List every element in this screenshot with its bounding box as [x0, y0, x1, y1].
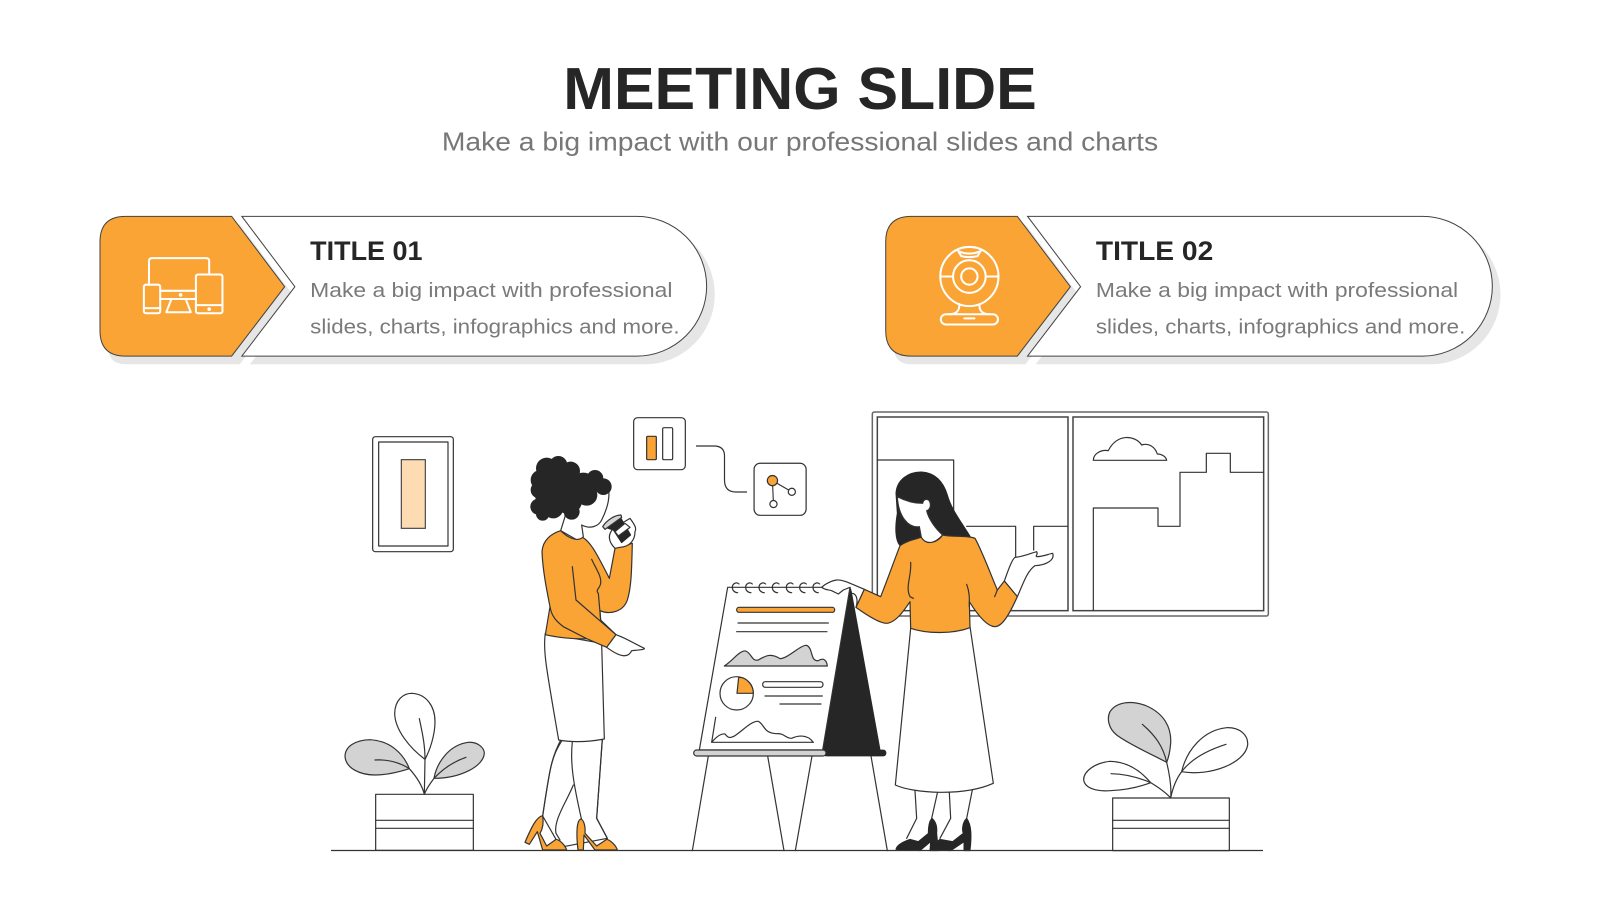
white text pill — [1028, 216, 1492, 356]
heading: title 02: TITLE 02 — [1096, 236, 1213, 266]
body text: slides, charts, infographics and more. — [310, 317, 680, 339]
icon: node graph bubble — [754, 463, 806, 515]
upper body — [856, 472, 1053, 633]
orange arrow tab — [100, 216, 285, 356]
window with city view — [872, 412, 1268, 616]
body text: Make a big impact with professional — [1096, 280, 1458, 302]
resting hand — [822, 580, 864, 607]
woman presenting — [822, 472, 1053, 851]
pie chart — [720, 677, 753, 710]
body text: Make a big impact with professional — [310, 280, 672, 302]
hand and cup — [609, 518, 636, 548]
plant left — [345, 693, 484, 850]
legs and shoes — [525, 738, 617, 850]
woman with coffee — [525, 456, 644, 850]
heading: title 01: TITLE 01 — [310, 236, 423, 266]
icon: bar chart bubble — [634, 418, 685, 470]
white text pill — [242, 216, 707, 356]
icon: webcam — [940, 247, 998, 324]
header — [442, 55, 1158, 157]
orange arrow tab — [886, 216, 1070, 356]
area chart — [724, 645, 827, 666]
panel: title 02 — [886, 216, 1500, 364]
skirt and shoes — [822, 580, 993, 851]
title: MEETING SLIDE — [563, 55, 1037, 122]
connector line — [696, 446, 747, 492]
icon: devices — [144, 258, 222, 313]
pointing hand — [607, 635, 644, 656]
body text — [310, 280, 680, 339]
panel: title 01 — [100, 216, 715, 364]
card shadow — [108, 224, 715, 364]
wall frame — [373, 437, 453, 552]
plant right — [1084, 703, 1248, 851]
body text: slides, charts, infographics and more. — [1096, 317, 1465, 339]
illustration: meeting scene — [331, 412, 1268, 851]
icon: cloud — [1093, 438, 1167, 460]
body text — [1096, 280, 1465, 339]
hair — [530, 456, 612, 521]
subtitle: Make a big impact with our professional slides and charts — [442, 129, 1158, 157]
line chart — [712, 717, 813, 742]
upper body and head — [530, 456, 644, 742]
card shadow — [894, 224, 1500, 364]
ground line — [331, 850, 1263, 852]
flipchart easel — [692, 583, 887, 851]
